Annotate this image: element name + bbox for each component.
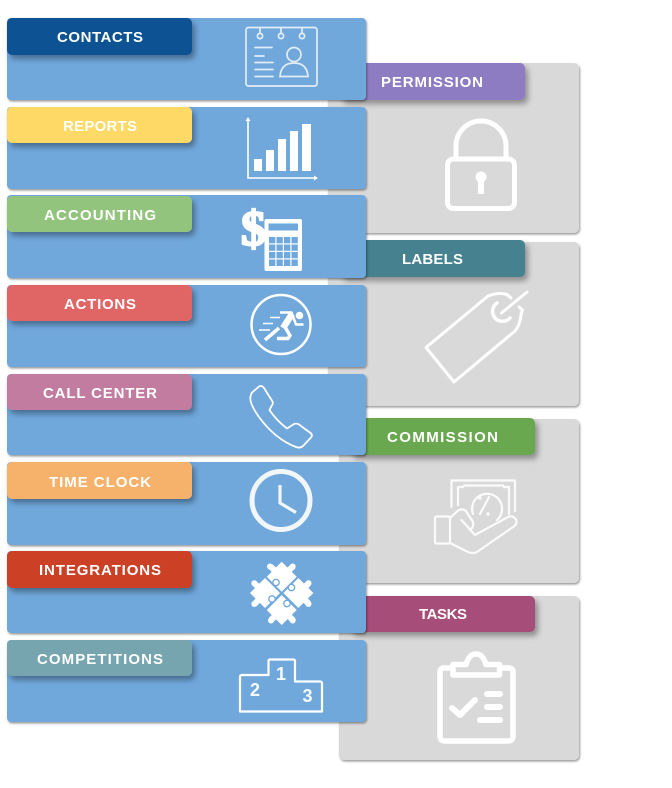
label: reports bbox=[7, 107, 192, 143]
panel: permission bbox=[328, 63, 579, 233]
panel: contacts bbox=[7, 18, 366, 100]
panel: tasks bbox=[339, 596, 579, 760]
label: time clock: TIME CLOCK bbox=[49, 474, 151, 491]
label: commission: COMMISSION bbox=[387, 429, 498, 446]
icon: padlock bbox=[448, 121, 514, 208]
label: actions bbox=[7, 285, 192, 321]
panel: labels bbox=[328, 240, 579, 406]
label: labels bbox=[340, 240, 525, 277]
panel: commission bbox=[339, 418, 579, 583]
label: contacts bbox=[7, 18, 192, 55]
label: tasks bbox=[350, 596, 535, 632]
label: call center: CALL CENTER bbox=[43, 385, 157, 402]
label: integrations bbox=[7, 551, 192, 588]
label: commission bbox=[350, 418, 535, 455]
label: integrations: INTEGRATIONS bbox=[39, 562, 161, 579]
icon: podium bbox=[240, 660, 322, 712]
icon: runner in circle bbox=[252, 295, 310, 354]
label: accounting bbox=[7, 196, 192, 232]
label: call center bbox=[7, 374, 192, 410]
icon: contact card bbox=[246, 28, 317, 86]
label: reports: REPORTS bbox=[63, 118, 137, 135]
icon: podium: 2 bbox=[250, 680, 260, 700]
icon: hand with commission bill bbox=[435, 480, 517, 553]
panel: actions bbox=[7, 285, 366, 367]
icon: clock bbox=[252, 472, 310, 530]
icon: dollar and calculator bbox=[241, 200, 302, 271]
icon: clipboard checklist bbox=[440, 654, 513, 741]
icon: telephone bbox=[250, 386, 312, 448]
label: actions: ACTIONS bbox=[64, 296, 136, 313]
icon: dollar and calculator: $ bbox=[241, 200, 266, 256]
icon: price tag bbox=[426, 292, 527, 382]
label: competitions bbox=[7, 640, 192, 676]
label: tasks: TASKS bbox=[419, 606, 467, 623]
icon: bar chart bbox=[246, 117, 318, 180]
label: permission: PERMISSION bbox=[381, 74, 483, 91]
panel: integrations bbox=[7, 551, 366, 633]
icon: podium: 3 bbox=[302, 686, 313, 706]
label: permission bbox=[340, 63, 525, 100]
label: time clock bbox=[7, 462, 192, 499]
panel: time clock bbox=[7, 462, 366, 545]
panel: call center bbox=[7, 374, 366, 455]
icon: podium: 1 bbox=[276, 664, 286, 684]
label: contacts: CONTACTS bbox=[57, 29, 143, 46]
label: accounting: ACCOUNTING bbox=[44, 207, 156, 224]
label: labels: LABELS bbox=[402, 251, 463, 268]
panel: accounting bbox=[7, 195, 366, 278]
icon: puzzle pieces bbox=[250, 562, 313, 625]
label: competitions: COMPETITIONS bbox=[37, 651, 163, 668]
panel: competitions bbox=[7, 640, 366, 722]
panel: reports bbox=[7, 107, 366, 189]
